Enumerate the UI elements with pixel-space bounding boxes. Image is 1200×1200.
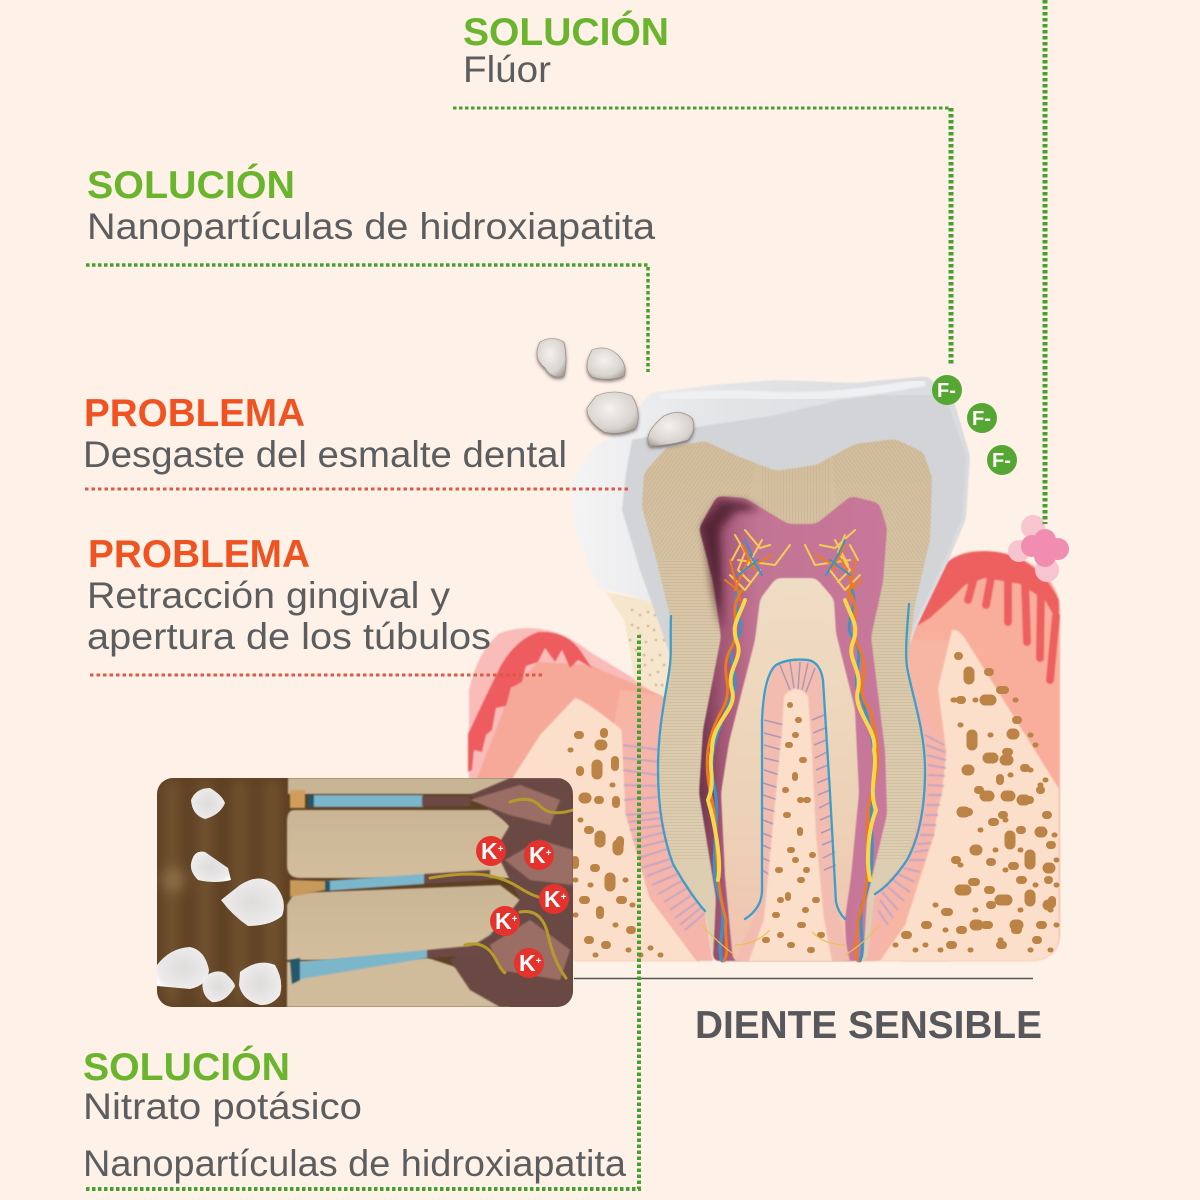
tubule 1 [290, 790, 470, 808]
potassium ions: + [498, 844, 504, 855]
potassium ions: + [546, 848, 552, 859]
problem: gingival recession: apertura de los túbulos [87, 616, 491, 657]
potassium ions: K [519, 950, 536, 976]
problem: gingival recession: Retracción gingival y [87, 575, 451, 616]
inset micro illustration: dentin tubules [157, 778, 573, 1007]
brown texture [161, 780, 272, 1005]
solution: potassium nitrate: SOLUCIÓN [83, 1045, 290, 1089]
fluoride ions: F- [972, 408, 991, 430]
cementum blue lines [658, 604, 925, 919]
bone pores [570, 656, 1057, 955]
tubule 3 [290, 945, 480, 984]
potassium ions: K [529, 842, 546, 868]
pulp nerves and vessels [707, 530, 878, 961]
potassium ions [476, 836, 569, 978]
baseline rule [574, 978, 1033, 980]
solution: potassium nitrate: Nanopartículas de hidroxiapatita [83, 1143, 626, 1184]
solution: hydroxyapatite [87, 163, 655, 247]
solution line: far right [1042, 0, 1048, 524]
tubule 2 [290, 870, 490, 897]
problem: enamel wear: Desgaste del esmalte dental [83, 434, 567, 475]
inter-root stripes [762, 662, 836, 875]
right gum [900, 551, 1060, 961]
exposed tubule area [606, 592, 672, 700]
pink particle cluster [1008, 515, 1069, 582]
inter-root bone [749, 689, 832, 961]
problem: gingival recession: PROBLEMA [88, 533, 310, 576]
pulp chamber [699, 496, 887, 961]
solution: fluoride: Flúor [463, 49, 551, 90]
caption: DIENTE SENSIBLE [695, 1004, 1042, 1047]
enamel [571, 376, 970, 660]
right bone [880, 630, 1059, 961]
potassium ions: K [495, 908, 512, 934]
potassium ions: K [481, 838, 498, 864]
hydroxyapatite connector [86, 265, 648, 372]
tan dentin blocks [287, 778, 573, 1007]
potassium connector [86, 635, 639, 1189]
potassium ions: + [561, 892, 567, 903]
problem: gingival recession [87, 533, 491, 657]
fluoride ions: F- [992, 450, 1011, 472]
right ligament [860, 665, 946, 961]
solution: potassium nitrate [83, 1045, 626, 1184]
pulp tissue [450, 778, 573, 1007]
enamel fragments [537, 338, 694, 446]
potassium ions: + [512, 914, 518, 925]
solution: fluoride [463, 10, 669, 90]
potassium ions: K [544, 886, 561, 912]
enamel problem connector [85, 488, 628, 490]
solution: fluoride: SOLUCIÓN [463, 10, 669, 54]
gingival problem connector [90, 674, 545, 676]
flúor solution connector [453, 108, 951, 364]
potassium ions: + [536, 956, 542, 967]
fluoride ions [932, 375, 1017, 475]
solution: hydroxyapatite: SOLUCIÓN [87, 163, 295, 207]
problem: enamel wear: PROBLEMA [84, 392, 305, 435]
central gum and ligament base [575, 640, 950, 961]
solution: hydroxyapatite: Nanopartículas de hidroxiapatita [87, 206, 655, 247]
nerve fibres [430, 799, 573, 978]
dentin [640, 430, 940, 961]
inter-root ligament [735, 660, 850, 961]
solution: potassium nitrate: Nitrato potásico [83, 1086, 362, 1127]
left gum [468, 628, 670, 800]
left ligament [622, 700, 713, 961]
inner dentin [721, 578, 859, 961]
root surface nerve lines [702, 925, 880, 955]
enamel particles [157, 788, 284, 1005]
illustration: tooth and gum cross-section [468, 376, 1060, 961]
left bone [500, 698, 697, 961]
problem: enamel wear [83, 392, 567, 475]
fluoride ions: F- [937, 380, 956, 402]
